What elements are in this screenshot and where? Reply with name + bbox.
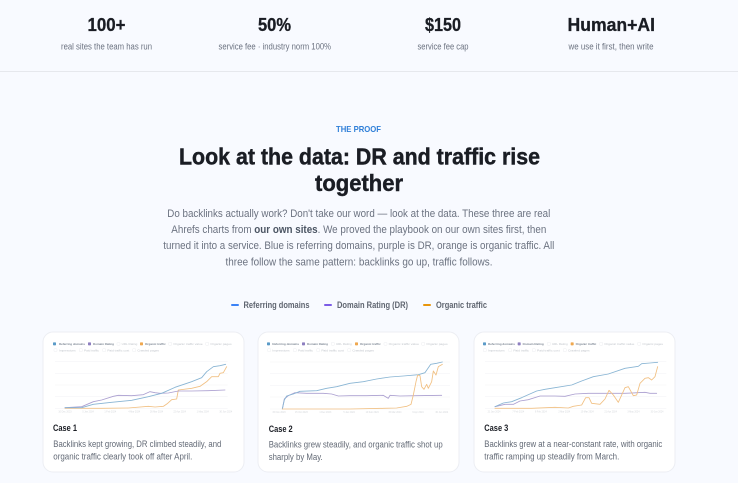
stat: $150 fee cap: service fee cap (418, 42, 468, 52)
chart: case 2: 5 Jan 2024 (343, 412, 356, 414)
case 2 description: Backlinks grew steadily, and organic traffic shot up (269, 440, 443, 450)
stat: $150 fee cap: $150 (425, 15, 461, 35)
chart: case 1: 1 Feb 2024 (104, 411, 117, 413)
chart: case 3: Organic traffic value (604, 342, 635, 346)
chart: case 1: 4 Mar 2024 (128, 410, 141, 413)
chart: case 1: 30 Jun 2024 (219, 411, 233, 413)
chart: case 2: 15 Nov 2023 (272, 412, 286, 414)
chart: case 3: 8 Feb 2024 (535, 411, 547, 413)
chart: case 1: Organic traffic (145, 342, 166, 346)
chart: case 3: 7 Feb 2024 (512, 411, 525, 413)
chart: case 3: Organic pages (642, 342, 664, 346)
eyebrow: the proof: THE PROOF (336, 124, 381, 134)
chart: case 1: URL Rating (122, 342, 138, 346)
chart: case 2: Crawled pages (352, 348, 375, 352)
stat: 100+ real sites: real sites the team has run (61, 42, 152, 52)
chart: case 2: Referring domains (272, 342, 300, 346)
chart: case 3: Paid traffic (513, 348, 530, 352)
chart: case 2: 19 Feb 2024 (366, 412, 379, 414)
stat: 100+ real sites (61, 15, 152, 52)
case 2 description (269, 440, 443, 463)
case 3 description: traffic ramping up steadily from March. (484, 451, 619, 462)
chart: case 3: 19 Mar 2024 (581, 410, 594, 413)
stat: 50% service fee: 50% (258, 15, 291, 35)
heading (179, 144, 540, 196)
chart: case 3: Crawled pages (568, 348, 590, 352)
chart legend: Organic traffic (436, 300, 487, 310)
chart: case 1: Impressions (59, 348, 76, 352)
chart: case 1: 22 Apr 2024 (173, 410, 187, 413)
chart: case 2: Organic traffic value (389, 342, 420, 346)
heading: Look at the data: DR and traffic rise (179, 144, 540, 170)
stat: 50% service fee: service fee · industry norm 100% (218, 42, 331, 52)
chart: case 2: Organic pages (426, 342, 448, 346)
chart: case 2: Impressions (272, 348, 290, 352)
chart: case 3: Organic traffic (576, 342, 597, 346)
heading: together (315, 170, 403, 196)
case 2 description: sharply by May. (269, 452, 323, 463)
chart: case 1: Organic pages (210, 342, 232, 346)
stat: Human+AI: we use it first, then write (568, 42, 654, 52)
chart: case 1: Paid traffic (84, 348, 100, 352)
intro paragraph: three follow the same pattern: backlinks go up, traffic follows. (226, 256, 492, 268)
chart: case 1: Organic traffic value (173, 342, 203, 346)
panel: case 3 (474, 332, 675, 472)
stat: Human+AI (568, 15, 655, 52)
case 1 description (53, 439, 221, 462)
chart: case 3: Referring domains (488, 342, 516, 346)
chart: case 2: Domain Rating (307, 342, 328, 346)
chart: case 3: Domain Rating (523, 342, 544, 346)
chart: case 2: 15 Mar 2024 (388, 411, 402, 414)
chart: case 2: URL Rating (336, 342, 352, 346)
chart: case 1: 26 Mar 2024 (150, 410, 164, 413)
stat: 50% service fee (218, 15, 331, 52)
chart: case 3: 3 May 2024 (627, 411, 640, 413)
chart: case 2: 15 Oct 2023 (295, 411, 308, 414)
case 1 title: Case 1 (53, 423, 78, 434)
chart: case 1: Domain Rating (93, 342, 114, 346)
chart: case 1: 5 Jan 2024 (82, 411, 95, 413)
intro paragraph: Do backlinks actually work? Don't take our word — look at the data. These three are real (167, 208, 550, 220)
chart: case 3 (483, 342, 666, 413)
panel: case 1 (43, 332, 244, 472)
chart: case 3: 21 Apr 2024 (604, 410, 618, 413)
chart: case 2: 30 Jun 2024 (435, 412, 449, 414)
chart: case 2: 9 Apr 2024 (412, 411, 424, 414)
intro paragraph: Ahrefs charts from our own sites. We proved the playbook on our own sites first, then (171, 224, 546, 236)
case 3 title: Case 3 (484, 423, 508, 434)
chart: case 3: 21 Jan 2024 (488, 411, 501, 413)
chart: case 3: 2 Mar 2024 (558, 410, 571, 413)
case 3 description (484, 439, 662, 462)
chart: case 2 (267, 342, 450, 414)
chart: case 2: Organic traffic (360, 342, 381, 346)
chart: case 1 (53, 342, 233, 413)
chart: case 1: 10 Dec 2023 (58, 411, 72, 413)
chart: case 3: URL Rating (552, 342, 568, 346)
chart legend: Referring domains (244, 300, 310, 310)
stat: $150 fee cap (418, 15, 468, 52)
chart: case 2: Paid traffic cost (321, 348, 344, 352)
case 3 description: Backlinks grew at a near-constant rate, with organic (484, 439, 662, 450)
chart: case 1: Referring domains (59, 342, 86, 346)
chart legend (231, 300, 487, 310)
chart: case 2: Paid traffic (298, 348, 314, 352)
chart: case 3: Impressions (488, 348, 505, 352)
chart: case 3: Paid traffic cost (537, 348, 560, 352)
stat: 100+ real sites: 100+ (88, 15, 126, 35)
intro paragraph (163, 208, 554, 268)
case 1 description: organic traffic clearly took off after April. (53, 451, 192, 462)
panel: case 2 (258, 332, 459, 472)
chart: case 2: 1 Dec 2023 (319, 412, 332, 414)
case 2 title: Case 2 (269, 424, 293, 435)
chart: case 1: Paid traffic cost (107, 348, 130, 352)
chart: case 1: 1 May 2024 (197, 411, 210, 413)
stats row (61, 15, 655, 52)
chart: case 3: 30 Jun 2024 (651, 411, 664, 413)
chart: case 1: Crawled pages (137, 348, 160, 352)
intro paragraph: turned it into a service. Blue is referring domains, purple is DR, orange is organic traffic. All (163, 240, 554, 252)
case 1 description: Backlinks kept growing, DR climbed steadily, and (53, 439, 221, 450)
stat: Human+AI: Human+AI (568, 15, 655, 35)
chart legend: Domain Rating (DR) (337, 300, 408, 310)
